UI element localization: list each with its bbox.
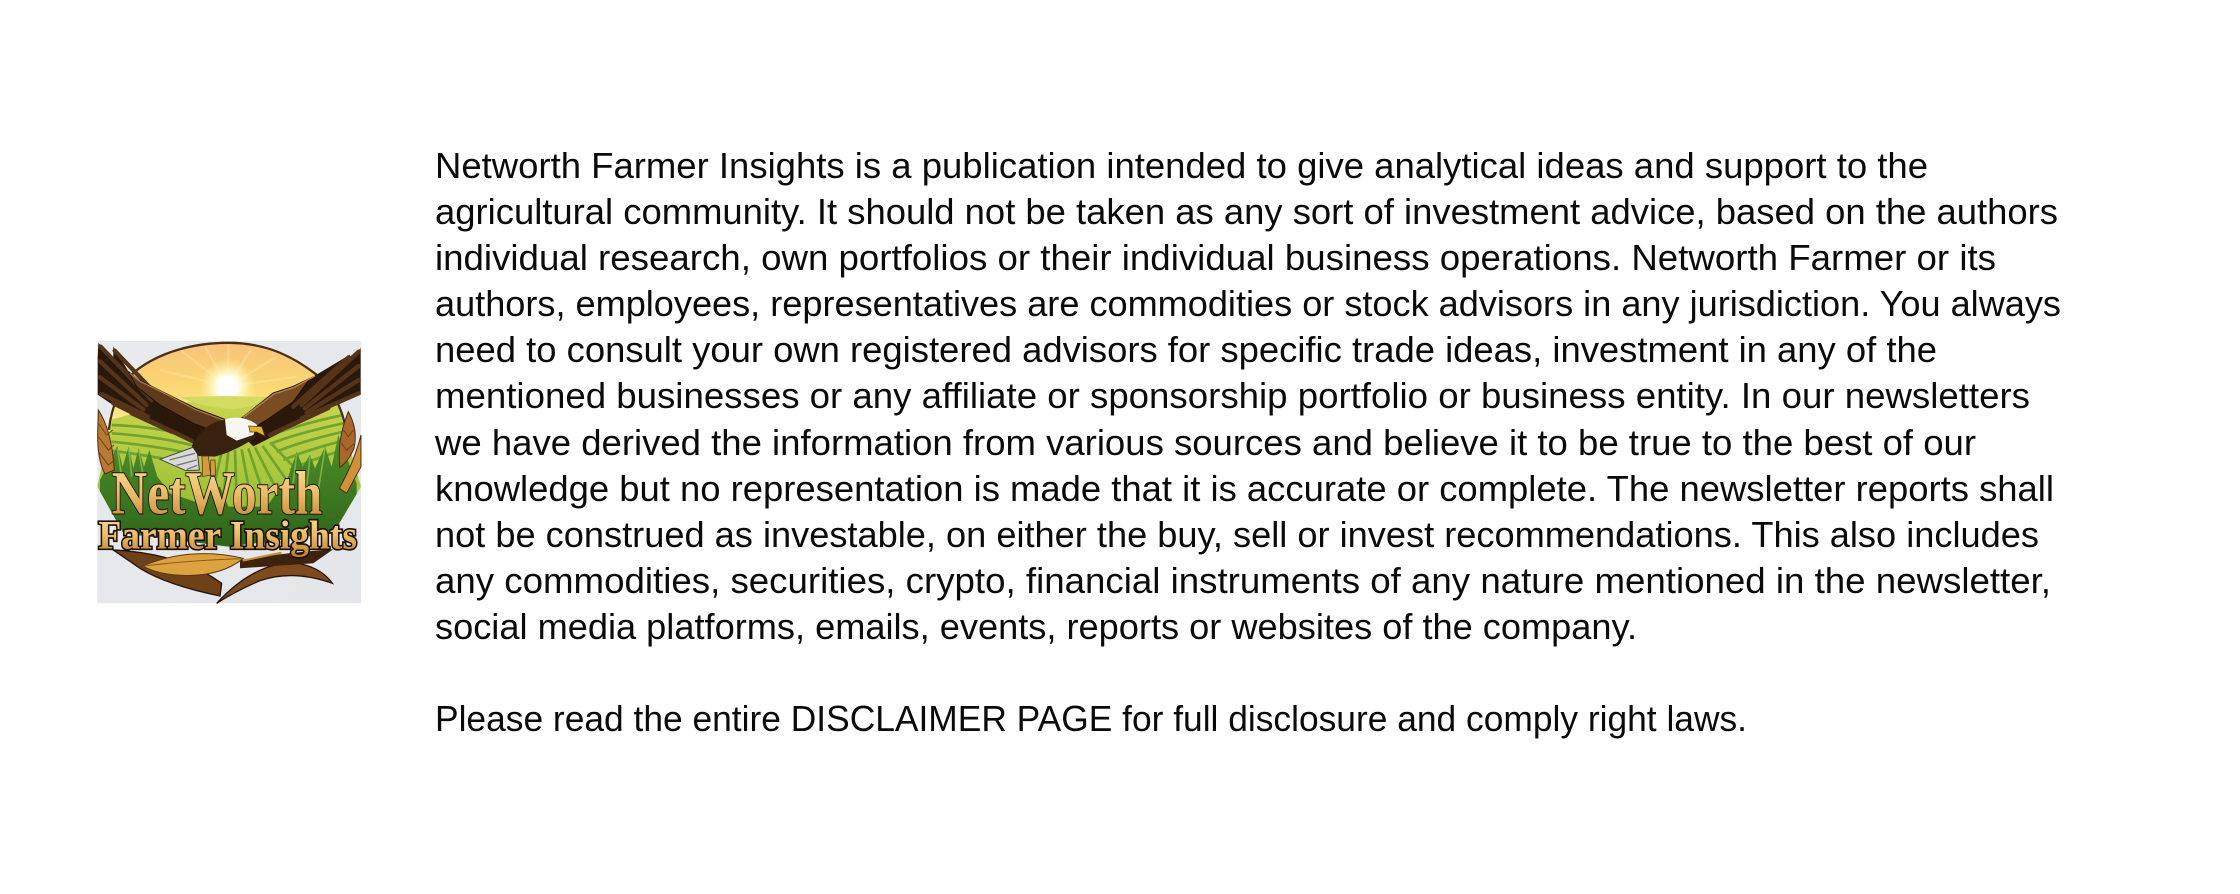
tail [160,446,199,471]
left wing [98,343,227,445]
eagle [98,343,361,477]
wheat ears and corn left and right [98,410,361,493]
disclaimer paragraph: social media platforms, emails, events, reports or websites of the company. [435,606,1637,647]
logo wordmark: NetWorth [112,459,322,527]
disclaimer paragraph: need to consult your own registered advisors for specific trade ideas, investment in any of the [435,329,1937,370]
disclaimer paragraph: not be construed as investable, on either the buy, sell or invest recommendations. This also includes [435,514,2039,555]
disclaimer paragraph [434,145,2061,647]
disclaimer paragraph: Networth Farmer Insights is a publication intended to give analytical ideas and support to the [435,145,1928,186]
head [225,418,257,441]
logo wordmark: Farmer Insights [98,512,357,557]
disclaimer paragraph: knowledge but no representation is made that it is accurate or complete. The newsletter reports shall [435,468,2054,509]
disclaimer paragraph: any commodities, securities, crypto, financial instruments of any nature mentioned in the newsletter, [435,560,2051,601]
body [192,420,257,457]
disclaimer paragraph: we have derived the information from various sources and believe it to be true to the best of our [434,422,1976,463]
disclaimer page canvas [97,152,2060,738]
logo emblem: sunrise over fields [97,343,361,547]
disclaimer paragraph: agricultural community. It should not be taken as any sort of investment advice, based on the authors [435,191,2058,232]
disclaimer paragraph: individual research, own portfolios or their individual business operations. Networth Farmer or its [435,237,1996,278]
beak [249,426,265,436]
disclaimer page notice: Please read the entire DISCLAIMER PAGE for full disclosure and comply right laws. [435,698,1747,739]
disclaimer paragraph: mentioned businesses or any affiliate or sponsorship portfolio or business entity. In our newsletters [435,375,2030,416]
logo: Networth Farmer Insights [97,341,361,603]
bottom feather and swooshes [113,549,333,603]
disclaimer paragraph: authors, employees, representatives are commodities or stock advisors in any jurisdiction. You always [435,283,2061,324]
logo wordmark [98,459,357,557]
logo background [97,341,361,603]
talons [202,456,216,477]
right wing [240,348,361,446]
